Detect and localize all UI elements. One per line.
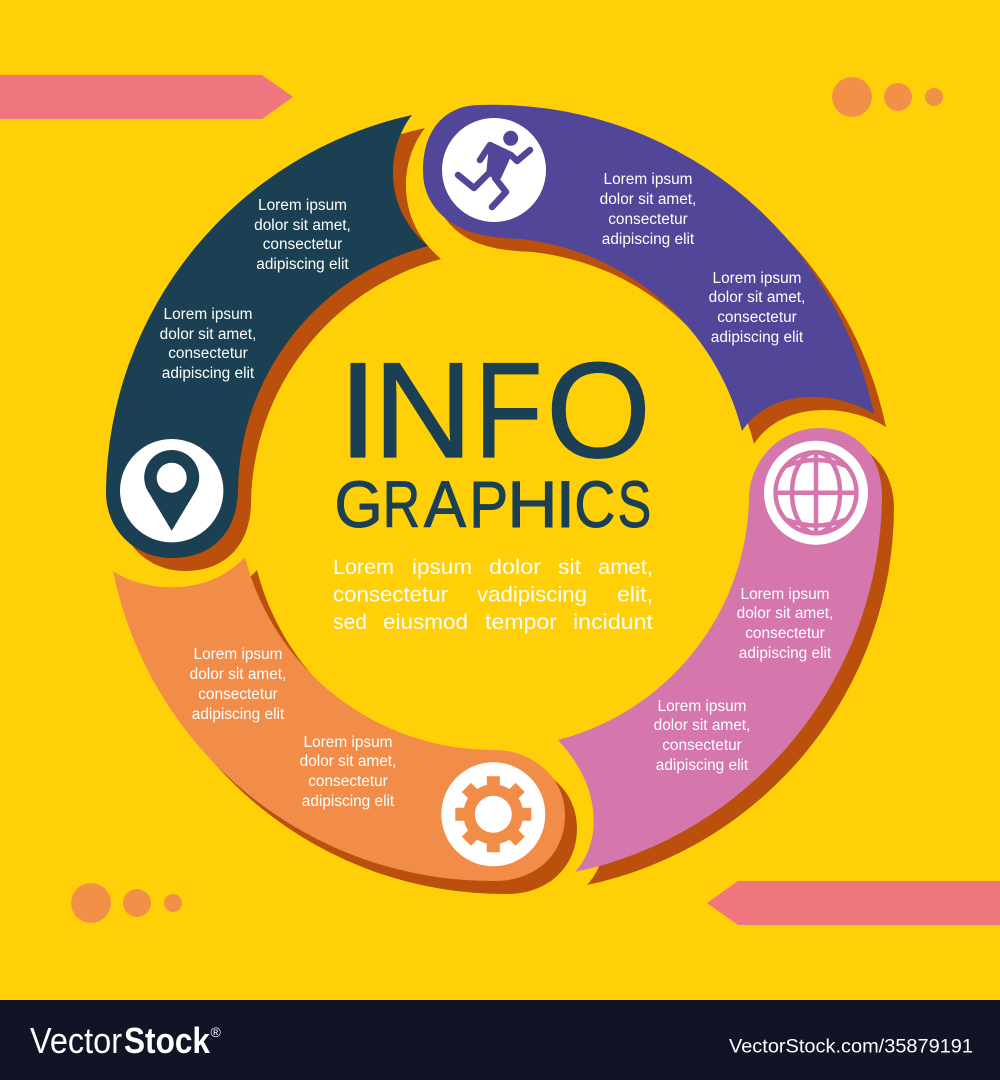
top-left arrow banner xyxy=(0,75,293,119)
title: GRAPHICS: R xyxy=(383,467,420,541)
bottom-right arrow banner xyxy=(707,881,1000,925)
text: orange upper: adipiscing elit xyxy=(192,706,285,723)
panel: purple segment xyxy=(423,105,886,444)
watermark footer bar xyxy=(0,1000,1000,1080)
center paragraph: sit xyxy=(558,555,581,579)
watermark logo: Stock xyxy=(124,1020,211,1061)
text: purple upper: dolor sit amet, xyxy=(600,191,696,208)
icon: gear xyxy=(441,762,545,866)
text: orange lower: adipiscing elit xyxy=(302,793,395,810)
title: INFO: I xyxy=(338,334,378,486)
title: GRAPHICS: I xyxy=(555,467,575,541)
title: GRAPHICS: G xyxy=(334,467,383,541)
panel: orange segment xyxy=(113,557,577,894)
text: pink upper: consectetur xyxy=(745,625,825,642)
text: pink lower: Lorem ipsum xyxy=(658,698,746,715)
text: purple lower: adipiscing elit xyxy=(711,329,804,346)
icon: globe xyxy=(764,441,868,545)
center paragraph: elit, xyxy=(617,582,653,606)
text: orange lower: dolor sit amet, xyxy=(300,753,396,770)
text: pink upper: adipiscing elit xyxy=(739,645,832,662)
text: purple lower: Lorem ipsum xyxy=(713,270,801,287)
text: teal upper: consectetur xyxy=(263,236,342,253)
top-right dots xyxy=(832,77,943,117)
watermark url: VectorStock.com/35879191 xyxy=(729,1036,973,1058)
center paragraph: vadipiscing xyxy=(477,582,587,606)
panel: dark teal segment xyxy=(106,115,441,571)
text: pink lower: adipiscing elit xyxy=(656,757,749,774)
title: INFO: N xyxy=(373,334,473,486)
center paragraph: dolor xyxy=(489,555,541,579)
title: GRAPHICS: H xyxy=(507,467,558,541)
text: pink upper: Lorem ipsum xyxy=(741,586,829,603)
text: orange upper: consectetur xyxy=(198,686,278,703)
text: pink lower: dolor sit amet, xyxy=(654,717,750,734)
center paragraph: incidunt xyxy=(573,610,653,634)
bottom-left dots xyxy=(71,883,182,923)
center paragraph: sed xyxy=(333,610,367,634)
text: purple upper: adipiscing elit xyxy=(602,231,695,248)
center paragraph: tempor xyxy=(485,610,557,634)
text: purple lower: consectetur xyxy=(717,309,797,326)
text: teal lower: dolor sit amet, xyxy=(160,326,256,343)
title: INFO: O xyxy=(546,334,651,486)
icon: map pin xyxy=(120,439,223,542)
center paragraph: consectetur xyxy=(333,582,448,606)
text: orange upper: Lorem ipsum xyxy=(194,646,282,663)
text: teal upper: adipiscing elit xyxy=(256,256,349,273)
text: pink lower: consectetur xyxy=(662,737,742,754)
text: orange lower: Lorem ipsum xyxy=(304,734,392,751)
text: purple lower: dolor sit amet, xyxy=(709,289,805,306)
icon: runner xyxy=(442,118,546,222)
center paragraph: amet, xyxy=(598,555,653,579)
text: orange lower: consectetur xyxy=(308,773,388,790)
text: teal upper: Lorem ipsum xyxy=(258,197,347,214)
title: GRAPHICS: P xyxy=(469,467,508,541)
text: teal lower: adipiscing elit xyxy=(162,365,255,382)
center paragraph: Lorem xyxy=(333,555,394,579)
center paragraph: ipsum xyxy=(412,555,472,579)
center paragraph: eiusmod xyxy=(383,610,468,634)
text: teal upper: dolor sit amet, xyxy=(254,217,351,234)
watermark logo: ® xyxy=(210,1024,222,1040)
text: teal lower: consectetur xyxy=(168,345,248,362)
title: INFO: F xyxy=(474,334,542,486)
text: teal lower: Lorem ipsum xyxy=(164,306,252,323)
text: purple upper: Lorem ipsum xyxy=(604,171,692,188)
watermark logo: Vector xyxy=(30,1020,122,1061)
text: orange upper: dolor sit amet, xyxy=(190,666,286,683)
text: pink upper: dolor sit amet, xyxy=(737,605,833,622)
title: GRAPHICS: S xyxy=(618,467,651,541)
title: GRAPHICS: C xyxy=(574,467,615,541)
panel: pink segment xyxy=(558,428,894,885)
title: GRAPHICS: A xyxy=(424,467,466,541)
text: purple upper: consectetur xyxy=(608,211,688,228)
